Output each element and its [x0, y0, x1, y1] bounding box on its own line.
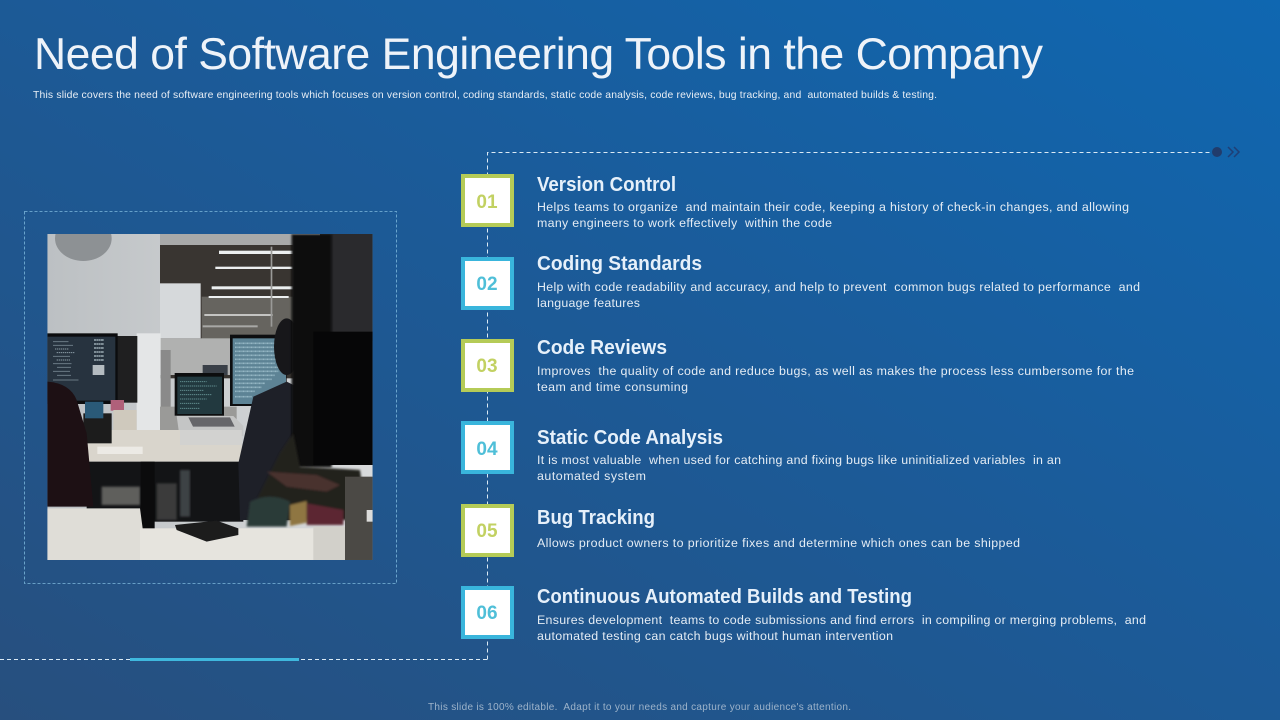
text 05: Allows product owners to prioritize fixes and determine which ones can be shipped	[537, 536, 1020, 550]
badge 04	[463, 423, 512, 472]
heading 06: Continuous Automated Builds and Testing	[537, 586, 912, 608]
badge 05	[463, 506, 512, 555]
text 01	[537, 200, 1129, 230]
badge 02	[463, 259, 512, 308]
badge 04: 04	[476, 439, 498, 460]
item 05: Bug Tracking	[463, 506, 1020, 555]
text 02	[537, 280, 1140, 310]
text 04	[537, 453, 1061, 483]
dashed timeline connector	[0, 152, 1217, 660]
image frame	[24, 212, 396, 584]
subtitle: This slide covers the need of software engineering tools which focuses on version control, coding standards, static code analysis, code reviews, bug tracking, and automated builds & testing.	[33, 90, 937, 101]
footer note: This slide is 100% editable. Adapt it to your needs and capture your audience's attention.	[428, 702, 851, 713]
heading 01: Version Control	[537, 174, 676, 196]
badge 01	[463, 176, 512, 225]
text 01: Helps teams to organize and maintain their code, keeping a history of check-in changes, and allowing	[537, 200, 1129, 214]
right monitor	[230, 335, 287, 406]
laptop	[175, 373, 243, 440]
badge 03: 03	[476, 356, 498, 377]
text 04: automated system	[537, 469, 646, 483]
text 06: automated testing can catch bugs without human intervention	[537, 629, 893, 643]
photo: developers in an office	[47, 216, 373, 560]
desk	[87, 430, 242, 462]
left monitor	[47, 333, 118, 404]
item 01: Version Control	[463, 174, 1129, 230]
dark foreground pillar	[320, 234, 373, 341]
item 02: Coding Standards	[463, 253, 1140, 310]
badge 06: 06	[476, 603, 498, 624]
text 02: language features	[537, 296, 640, 310]
badge 06	[463, 588, 512, 637]
badge 01: 01	[476, 192, 498, 213]
arrow chevrons	[1228, 147, 1239, 157]
text 03: team and time consuming	[537, 380, 688, 394]
blurred foreground table	[47, 477, 373, 560]
text 06: Ensures development teams to code submissions and find errors in compiling or merging problems, and	[537, 613, 1146, 627]
text 04: It is most valuable when used for catching and fixing bugs like uninitialized variables in an	[537, 453, 1061, 467]
badge 05: 05	[476, 521, 498, 542]
text 03	[537, 364, 1134, 394]
text 02: Help with code readability and accuracy, and help to prevent common bugs related to performance and	[537, 280, 1140, 294]
right person	[238, 382, 297, 520]
left person	[47, 382, 93, 507]
item 04: Static Code Analysis	[463, 423, 1061, 483]
badge 02: 02	[476, 274, 498, 295]
heading 03: Code Reviews	[537, 337, 667, 359]
heading 05: Bug Tracking	[537, 507, 655, 529]
heading 02: Coding Standards	[537, 253, 702, 275]
text 03: Improves the quality of code and reduce bugs, as well as makes the process less cumbersome for the	[537, 364, 1134, 378]
badge 03	[463, 341, 512, 390]
text 06	[537, 613, 1146, 643]
text 01: many engineers to work effectively within the code	[537, 216, 832, 230]
under desk	[87, 462, 243, 522]
accent bar	[130, 658, 299, 661]
title: Need of Software Engineering Tools in the Company	[34, 30, 1044, 79]
striped sleeve	[247, 433, 367, 527]
connector end dot	[1212, 147, 1222, 157]
item 03: Code Reviews	[463, 337, 1134, 394]
item 06: Continuous Automated Builds and Testing	[463, 586, 1146, 643]
heading 04: Static Code Analysis	[537, 427, 723, 449]
